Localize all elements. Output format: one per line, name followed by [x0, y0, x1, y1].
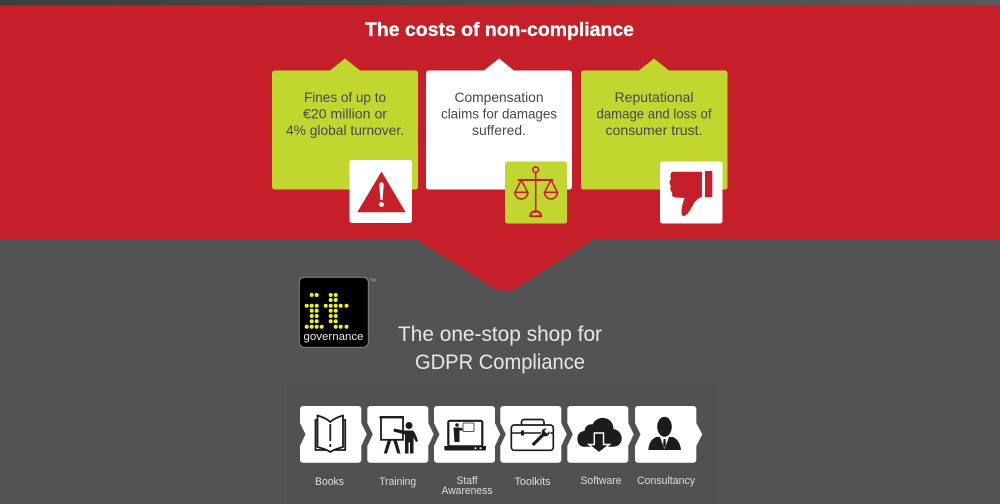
title: The costs of non-compliance	[365, 19, 634, 41]
service: software	[567, 406, 634, 463]
heading: one-stop shop: The one-stop shop for	[398, 323, 602, 346]
card: compensation: claims for damages	[441, 106, 557, 122]
service labels: Awareness	[442, 485, 493, 497]
service labels: Books	[315, 476, 344, 488]
card: reputation: Reputational	[614, 89, 694, 105]
card: reputation: consumer trust.	[606, 122, 702, 138]
service labels: Toolkits	[514, 476, 551, 488]
card: fines: 4% global turnover.	[286, 122, 404, 138]
card: compensation	[426, 58, 572, 190]
heading: one-stop shop	[398, 323, 602, 374]
card: compensation: suffered.	[472, 122, 526, 138]
card: fines: €20 million or	[303, 106, 387, 122]
card: compensation: Compensation	[454, 89, 544, 105]
icon: thumbs down	[660, 162, 722, 224]
service labels: Consultancy	[637, 475, 695, 487]
logo: IT Governance: TM	[370, 278, 376, 282]
service labels: Staff	[456, 475, 478, 487]
card: reputation: damage and loss of	[596, 106, 712, 122]
logo: IT Governance	[299, 277, 376, 347]
service labels: Software	[580, 475, 622, 487]
service: staff awareness	[434, 406, 500, 463]
icon: scales of justice	[505, 162, 567, 224]
icon: warning triangle	[350, 160, 412, 223]
card: reputation	[581, 58, 728, 190]
card: fines: Fines of up to	[304, 89, 386, 105]
service: books	[300, 406, 367, 463]
service: training	[367, 406, 434, 463]
card: fines	[272, 58, 418, 190]
service labels: Training	[379, 476, 416, 488]
service: consultancy	[635, 406, 702, 463]
panel: services background	[287, 382, 715, 504]
panel: red costs section	[0, 6, 1000, 291]
service: toolkits	[500, 406, 567, 463]
logo: IT Governance: governance	[304, 331, 364, 343]
service labels	[315, 475, 695, 497]
heading: one-stop shop: GDPR Compliance	[415, 351, 585, 374]
